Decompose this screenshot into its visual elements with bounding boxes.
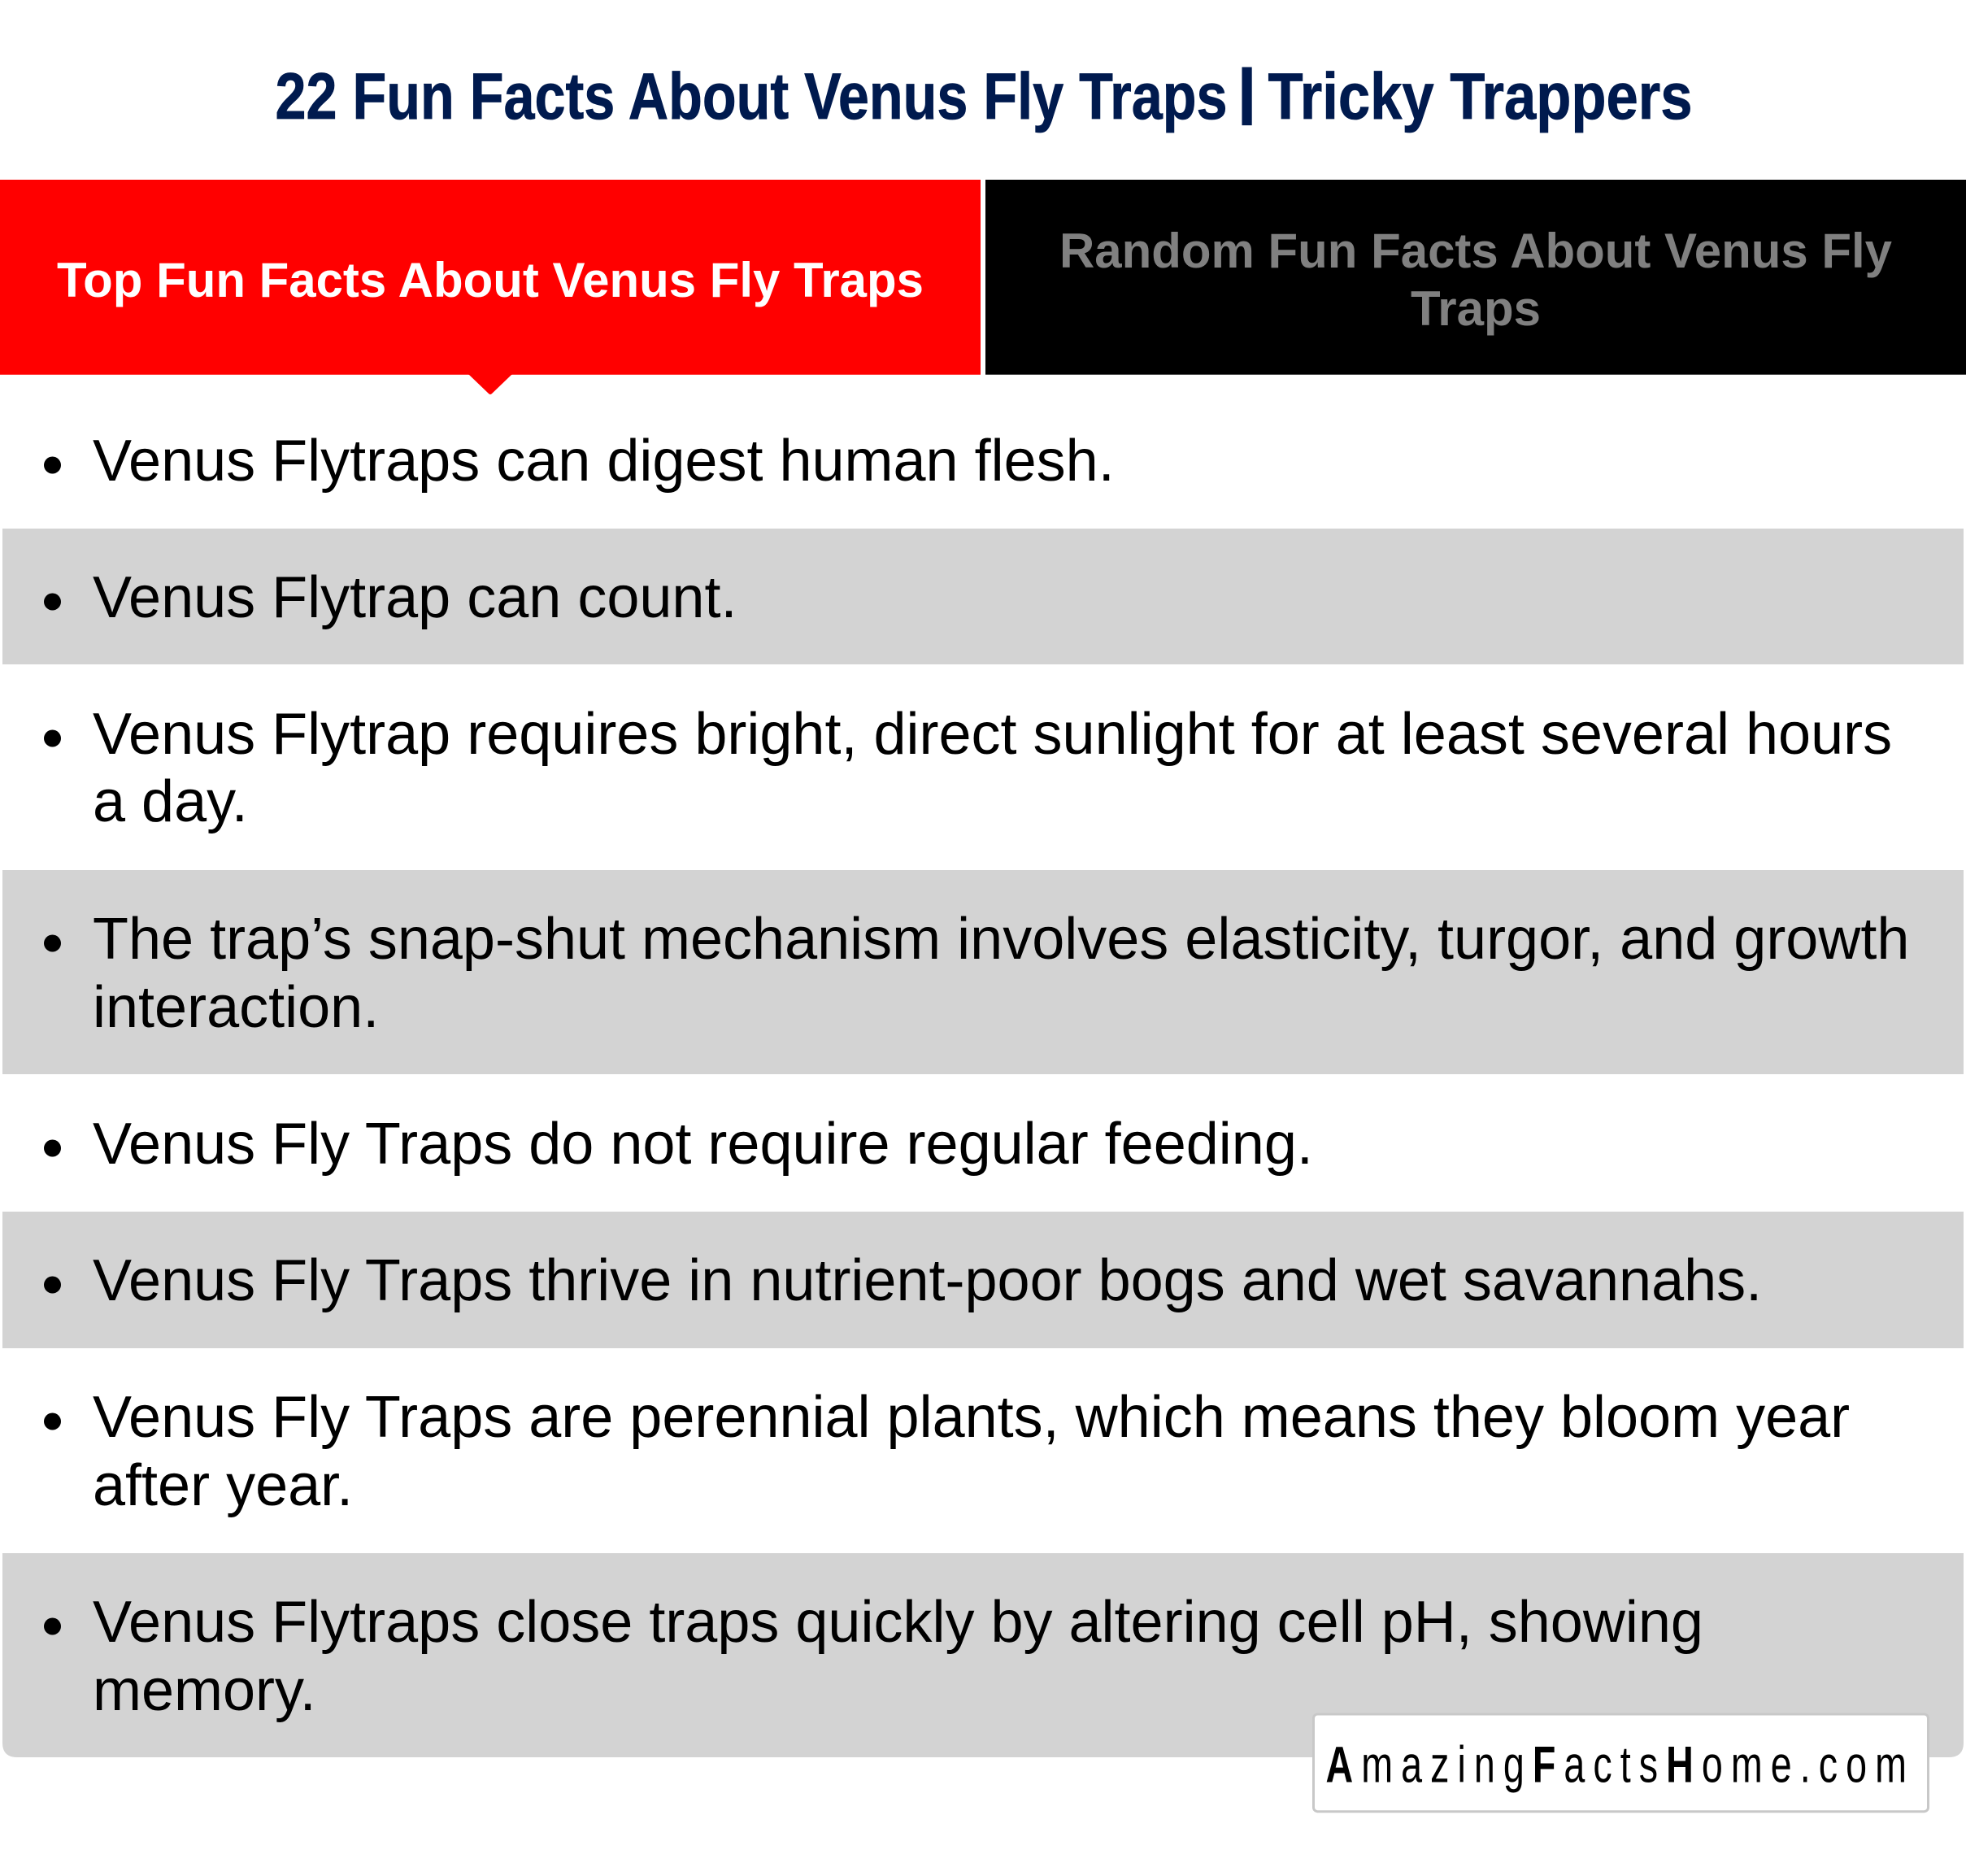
fact 3 [44, 702, 1892, 834]
fact 1: Venus Flytraps can digest human flesh. [93, 429, 1115, 494]
tab: random fun facts (inactive) [985, 180, 1966, 375]
title: Tricky Trappers [1268, 60, 1693, 133]
fact 8 [2, 1553, 1964, 1757]
watermark badge [1314, 1714, 1929, 1812]
title: 22 Fun Facts About Venus Fly Traps [275, 60, 1228, 133]
watermark text: AmazingFactsHome.com [1325, 1736, 1915, 1793]
fact 8: memory. [93, 1658, 316, 1723]
tab label: random facts: Traps [1411, 281, 1541, 336]
fact 6 [2, 1212, 1964, 1348]
tab label: random facts [1059, 224, 1893, 336]
tab label: top facts: Top Fun Facts About Venus Fly Traps [57, 253, 924, 307]
fact 3: a day. [93, 769, 248, 834]
tab label: random facts: Random Fun Facts About Venus Fly [1059, 224, 1893, 278]
fact 8: Venus Flytraps close traps quickly by altering cell pH, showing [93, 1590, 1703, 1655]
fact 3: Venus Flytrap requires bright, direct sunlight for at least several hours [93, 702, 1892, 767]
fact 7: Venus Fly Traps are perennial plants, which means they bloom year [93, 1385, 1850, 1450]
tab: top fun facts (active) [0, 180, 981, 394]
fact 5: Venus Fly Traps do not require regular feeding. [93, 1112, 1313, 1177]
fact list [2, 429, 1964, 1757]
fact 4 [2, 870, 1964, 1074]
fact 7: after year. [93, 1453, 353, 1518]
fact 6: Venus Fly Traps thrive in nutrient-poor bogs and wet savannahs. [93, 1248, 1762, 1313]
fact 7 [44, 1385, 1850, 1518]
title: | [1239, 59, 1255, 124]
tab pointer arrow [468, 374, 512, 394]
fact 4: interaction. [93, 975, 379, 1040]
fact 4: The trap’s snap-shut mechanism involves elasticity, turgor, and growth [93, 907, 1909, 972]
fact 2 [2, 529, 1964, 664]
fact 2: Venus Flytrap can count. [93, 565, 737, 630]
